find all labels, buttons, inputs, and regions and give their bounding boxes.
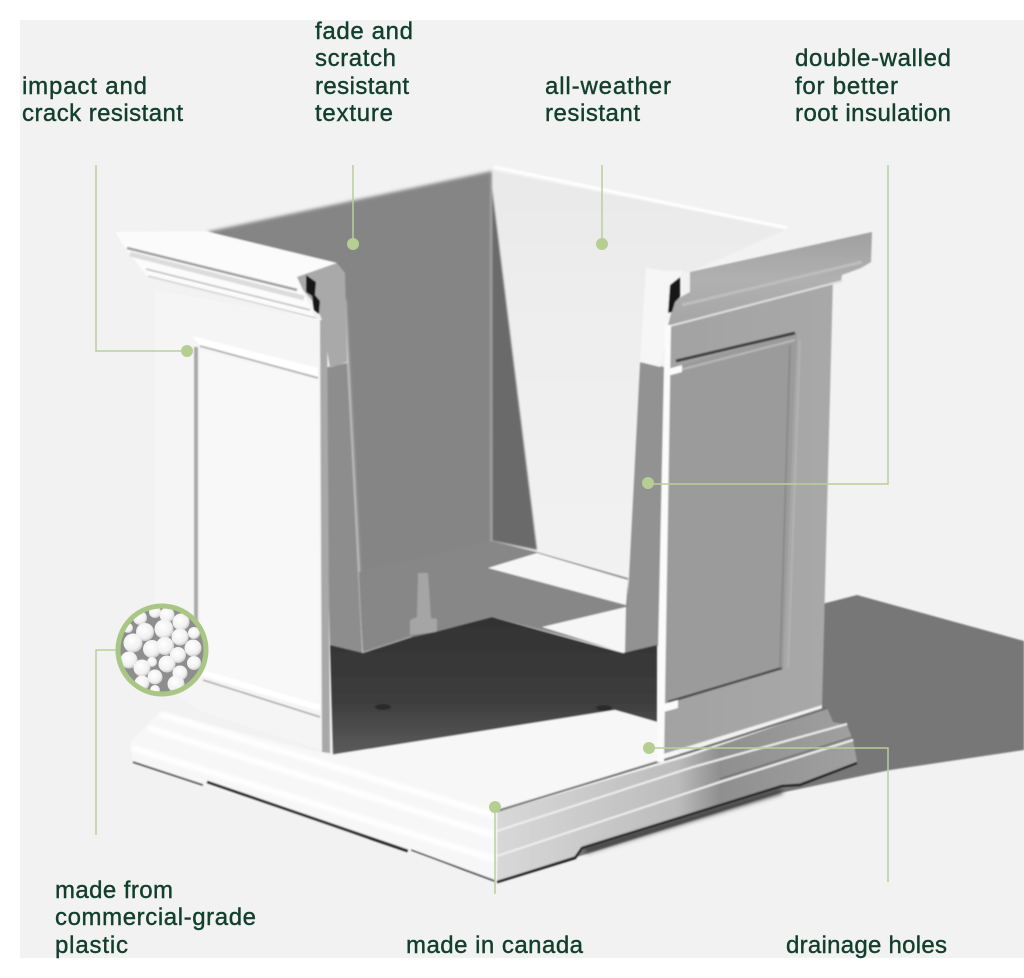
label: impact and crack resistant: impact and	[22, 73, 147, 100]
back right interior wall	[492, 171, 787, 655]
label: impact and crack resistant: crack resistant	[22, 100, 183, 127]
left cornice	[115, 231, 337, 320]
planter cutaway illustration	[115, 167, 1024, 882]
plastic pellets magnifier	[118, 606, 206, 695]
label: all-weather resistant: all-weather	[545, 73, 671, 100]
base right plinth	[497, 708, 857, 882]
callout dots	[181, 238, 655, 813]
label: double-walled for better root insulation: for better	[795, 73, 898, 100]
right rim cross-section	[640, 268, 682, 367]
label: made from commercial-grade plastic: plastic	[55, 932, 128, 959]
label: fade and scratch resistant texture: scratch	[315, 45, 396, 72]
ground shadow	[510, 595, 1024, 878]
left outer wall	[155, 290, 330, 753]
right outer wall	[660, 278, 833, 755]
label: fade and scratch resistant texture: resistant	[315, 73, 409, 100]
label: fade and scratch resistant texture: fade and	[315, 18, 413, 45]
label: double-walled for better root insulation	[795, 45, 951, 127]
label: made from commercial-grade plastic: made from	[55, 877, 173, 904]
label: double-walled for better root insulation: root insulation	[795, 100, 951, 127]
label: all-weather resistant: resistant	[545, 100, 640, 127]
label: all-weather resistant	[545, 73, 671, 127]
notches	[660, 365, 682, 713]
base underside lines	[133, 762, 495, 881]
right inner wall section	[625, 362, 664, 653]
back left interior wall	[206, 171, 492, 590]
white cut edge	[657, 325, 671, 762]
left rim cross-section	[297, 263, 347, 368]
label: made from commercial-grade plastic	[55, 877, 256, 959]
back rim highlight	[494, 167, 787, 228]
label: double-walled for better root insulation: double-walled	[795, 45, 951, 72]
label: made from commercial-grade plastic: commercial-grade	[55, 904, 256, 931]
base floor and left side	[130, 710, 680, 881]
drainage holes	[375, 704, 612, 711]
label: fade and scratch resistant texture: texture	[315, 100, 393, 127]
label: made in canada: made in canada	[406, 932, 584, 959]
label: impact and crack resistant	[22, 73, 183, 127]
interior wall shadow	[492, 188, 537, 550]
base ridges left	[132, 714, 497, 860]
right cornice	[666, 232, 872, 328]
dark underside of planter	[330, 617, 657, 755]
label: drainage holes: drainage holes	[786, 932, 947, 959]
interior ledge	[348, 363, 628, 653]
left inner wall section	[323, 363, 362, 653]
label: fade and scratch resistant texture	[315, 18, 413, 127]
callout lines	[96, 165, 888, 894]
